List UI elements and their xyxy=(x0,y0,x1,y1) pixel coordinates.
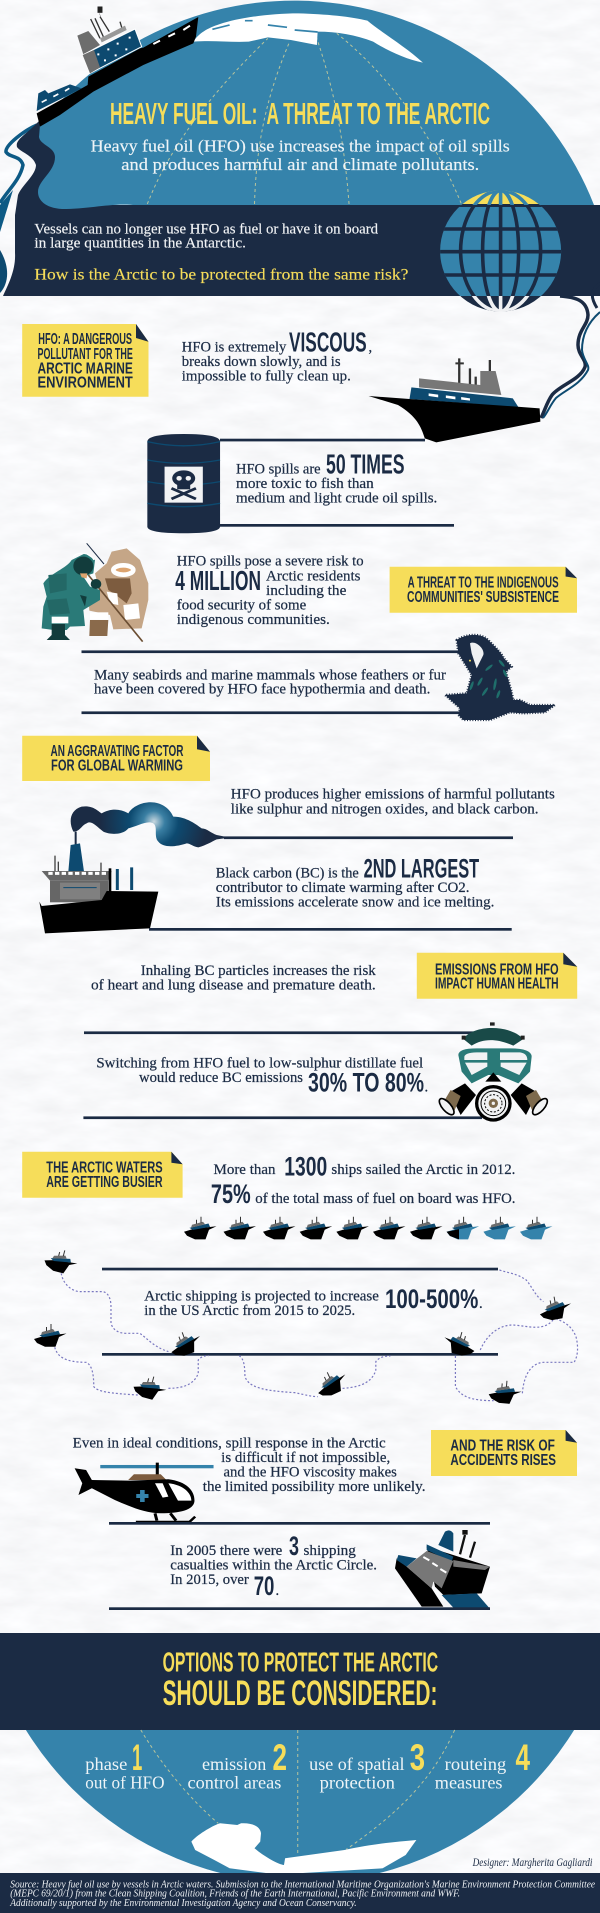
label: threat to indigenous xyxy=(390,567,577,613)
text: projected increase: Arctic shipping is projected to increase xyxy=(144,1289,379,1305)
text: emissions xyxy=(231,787,555,817)
label: risk of accidents: AND THE RISK OF xyxy=(450,1438,555,1455)
panel: HFO dangerous pollutant xyxy=(22,324,577,720)
text: viscous xyxy=(182,327,372,385)
text: 30% to 80%: Switching from HFO fuel to low-sulphur distillate fuel xyxy=(96,1056,423,1072)
label: aggravating factor xyxy=(22,736,210,781)
text: seabirds: have been covered by HFO face hypothermia and death. xyxy=(94,682,430,698)
divider lines xyxy=(83,1031,482,1119)
option 2: 2 xyxy=(272,1737,287,1778)
icon: ship in oil xyxy=(369,358,540,442)
text: viscous: VISCOUS xyxy=(289,327,367,358)
text: 50 times: HFO spills are xyxy=(236,461,321,477)
text: 30% to 80%: 30% TO 80% xyxy=(308,1068,424,1098)
Antarctic statement: in large quantities in the Antarctic. xyxy=(34,236,246,252)
label: risk of accidents: ACCIDENTS RISES xyxy=(450,1452,556,1469)
divider lines xyxy=(149,836,513,931)
text: 30% to 80%: . xyxy=(424,1080,428,1096)
divider lines xyxy=(220,439,454,527)
icon: smoking ship xyxy=(39,802,230,933)
text: viscous: impossible to fully clean up. xyxy=(182,369,351,385)
label: arctic waters busier: THE ARCTIC WATERS xyxy=(46,1159,163,1176)
option 3: 3 xyxy=(410,1737,425,1778)
option 1: 1 xyxy=(132,1737,142,1778)
text: spill response: Even in ideal conditions, spill response in the Arctic xyxy=(73,1435,386,1451)
options band xyxy=(0,1633,600,1730)
text: 4 million: food security of some xyxy=(177,597,306,613)
label: aggravating factor: FOR GLOBAL WARMING xyxy=(51,758,183,775)
text: casualties: casualties within the Arctic Circle. xyxy=(170,1557,377,1573)
text: 30% to 80% xyxy=(96,1056,428,1098)
option 4: routeing xyxy=(445,1754,506,1774)
dotted ship routes xyxy=(55,1270,578,1401)
lower dome xyxy=(26,1730,574,1873)
option 4 xyxy=(435,1737,530,1792)
label: dangerous pollutant: POLLUTANT FOR THE xyxy=(38,346,133,363)
option 1: phase xyxy=(85,1754,127,1774)
label: arctic waters busier: ARE GETTING BUSIER xyxy=(46,1174,163,1191)
label: dangerous pollutant: ENVIRONMENT xyxy=(38,375,133,392)
heading: options xyxy=(163,1647,438,1713)
text: inhaling: of heart and lung disease and premature death. xyxy=(91,977,376,993)
text: 1300 ships xyxy=(214,1151,515,1181)
option 3 xyxy=(309,1737,425,1792)
text: 2nd largest xyxy=(216,853,494,911)
text: 2nd largest: 2ND LARGEST xyxy=(364,853,479,883)
navy band xyxy=(3,118,600,296)
panel: header xyxy=(0,1,600,316)
panel: busier waters xyxy=(22,1151,578,1610)
text: 4 million xyxy=(175,554,364,628)
text: viscous: breaks down slowly, and is xyxy=(182,354,341,370)
icon: globe xyxy=(440,190,562,312)
dome: ocean xyxy=(38,1,594,209)
option 4: measures xyxy=(435,1772,502,1792)
subtitle: and produces harmful air and climate pollutants. xyxy=(121,155,479,174)
text: 75%: of the total mass of fuel on board was HFO. xyxy=(255,1191,516,1207)
subtitle: Heavy fuel oil (HFO) use increases the impact of oil spills xyxy=(91,137,510,156)
footer: sources: Additionally supported by the Environmental Investigation Agency and Ocean Conservancy. xyxy=(9,1898,357,1909)
icon: toxic barrel xyxy=(147,434,220,533)
option 1: out of HFO xyxy=(85,1772,164,1792)
label: aggravating factor: AN AGGRAVATING FACTOR xyxy=(50,743,184,760)
text: seabirds xyxy=(94,667,446,698)
text: viscous: , xyxy=(368,340,372,356)
label: dangerous pollutant: ARCTIC MARINE xyxy=(38,360,133,377)
option 4: 4 xyxy=(516,1737,530,1778)
panel: global warming xyxy=(22,736,577,1122)
option 2: control areas xyxy=(188,1772,281,1792)
subtitle xyxy=(91,137,510,174)
text: 4 million: indigenous communities. xyxy=(177,612,330,628)
label: risk of accidents xyxy=(431,1430,577,1476)
text: projected increase: in the US Arctic from 2015 to 2025. xyxy=(144,1303,355,1319)
dotted meridians xyxy=(147,30,461,204)
divider lines xyxy=(82,650,460,714)
ice shape xyxy=(191,1823,416,1873)
text: casualties xyxy=(170,1531,377,1601)
icon: sinking ship xyxy=(395,1530,490,1608)
dotted dividers xyxy=(141,1730,455,1855)
text: 75% xyxy=(211,1179,516,1209)
text: 4 million: 4 MILLION xyxy=(175,565,261,596)
option 3: use of spatial xyxy=(309,1754,404,1774)
text: 50 times: more toxic to fish than xyxy=(236,476,375,492)
option 2: emission xyxy=(202,1754,266,1774)
text: 2nd largest: contributor to climate warming after CO2. xyxy=(216,880,470,896)
text: 1300 ships: More than xyxy=(214,1162,276,1178)
icon: gas mask xyxy=(437,1022,550,1122)
text: 1300 ships: ships sailed the Arctic in 2012. xyxy=(331,1162,515,1178)
option 1 xyxy=(85,1737,164,1792)
label: dangerous pollutant xyxy=(22,324,149,397)
text: 50 times: 50 TIMES xyxy=(326,448,404,479)
question: How is the Arctic to be protected from the same risk? xyxy=(34,266,409,283)
polar ice cap xyxy=(193,13,423,63)
icon group: scattered ships xyxy=(34,1246,573,1405)
text: 50 times xyxy=(236,448,437,507)
panel: options xyxy=(0,1633,600,1873)
icon: ship on the dome xyxy=(37,7,198,127)
text: emissions: HFO produces higher emissions of harmful pollutants xyxy=(231,787,555,803)
divider line xyxy=(109,1607,490,1610)
text: casualties: 3 xyxy=(289,1531,299,1561)
option 2 xyxy=(188,1737,287,1792)
text: inhaling: Inhaling BC particles increases the risk xyxy=(141,963,377,979)
oil spill stream right xyxy=(541,283,600,418)
footer: sources: (MEPC 69/20/1) from the Clean Shipping Coalition, Friends of the Earth International, Pacific Environment and WWF. xyxy=(10,1889,460,1900)
text: spill response xyxy=(73,1435,425,1495)
text: 2nd largest: Black carbon (BC) is the xyxy=(216,865,359,881)
text: 1300 ships: 1300 xyxy=(284,1151,327,1181)
text: casualties: In 2005 there were xyxy=(170,1543,282,1559)
text: 4 million: Arctic residents xyxy=(266,568,361,584)
text: emissions: like sulphur and nitrogen oxides, and black carbon. xyxy=(231,801,539,817)
text: 75%: 75% xyxy=(211,1179,251,1209)
text: 2nd largest: Its emissions accelerate snow and ice melting. xyxy=(216,895,494,911)
text: 30% to 80%: would reduce BC emissions xyxy=(139,1070,303,1086)
text: casualties: . xyxy=(276,1583,279,1599)
oil spill stream left xyxy=(0,125,37,293)
icon: oiled bird xyxy=(445,635,555,720)
divider line xyxy=(109,1522,490,1525)
text: spill response: the limited possibility more unlikely. xyxy=(203,1479,426,1495)
text: spill response: is difficult if not impossible, xyxy=(221,1450,390,1466)
icon: indigenous people xyxy=(42,543,148,642)
divider lines xyxy=(102,1268,498,1356)
Antarctic statement: Vessels can no longer use HFO as fuel or have it on board xyxy=(34,221,379,237)
text: 4 million: including the xyxy=(266,583,346,599)
footer: sources xyxy=(0,1873,600,1913)
text: 4 million: HFO spills pose a severe risk to xyxy=(177,554,364,570)
text: projected increase xyxy=(144,1284,483,1319)
text: casualties: In 2015, over xyxy=(170,1572,249,1588)
text: 50 times: medium and light crude oil spills. xyxy=(236,491,437,507)
option 3: protection xyxy=(320,1772,395,1792)
text: inhaling xyxy=(91,963,377,993)
label: dangerous pollutant: HFO: A DANGEROUS xyxy=(38,331,132,348)
text: projected increase: 100-500% xyxy=(385,1284,478,1314)
text: seabirds: Many seabirds and marine mammals whose feathers or fur xyxy=(94,667,446,683)
label: human health xyxy=(417,953,577,999)
text: viscous: HFO is extremely xyxy=(182,340,287,356)
icon row: ten ships xyxy=(184,1217,552,1239)
label: arctic waters busier xyxy=(22,1152,183,1198)
text: casualties: shipping xyxy=(304,1543,356,1559)
icon: helicopter xyxy=(75,1463,214,1522)
text: casualties: 70 xyxy=(254,1571,274,1601)
Antarctic statement xyxy=(34,221,379,252)
text: spill response: and the HFO viscosity makes xyxy=(224,1465,397,1481)
text: projected increase: . xyxy=(479,1296,483,1312)
